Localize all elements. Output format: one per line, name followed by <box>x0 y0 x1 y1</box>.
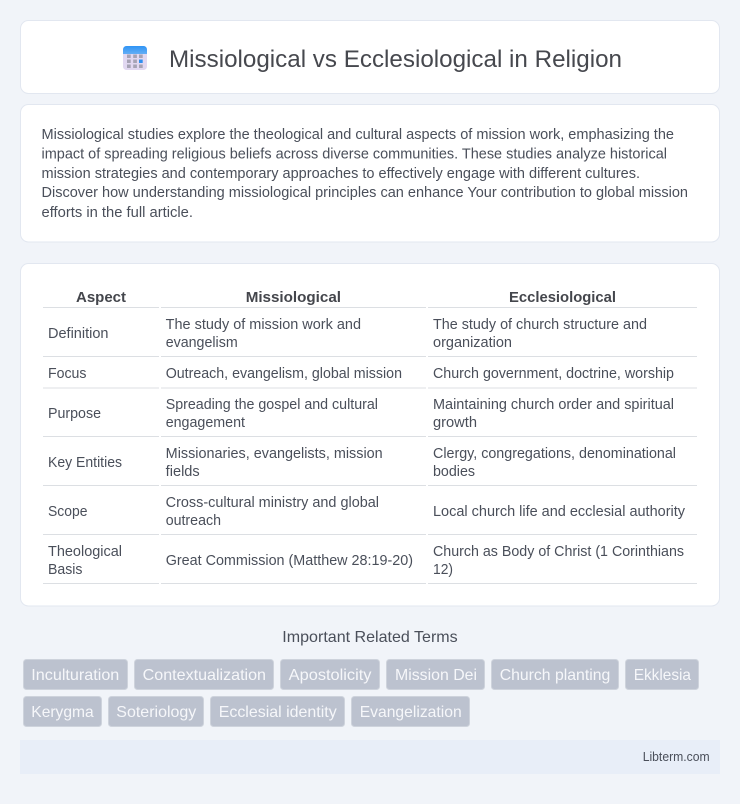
tag list <box>24 660 698 726</box>
tag: Soteriology: Soteriology <box>116 704 196 721</box>
table row: key entities: Key Entities <box>48 455 122 471</box>
tag: Ecclesial identity: Ecclesial identity <box>219 704 337 721</box>
tag: Church planting: Church planting <box>500 667 610 684</box>
panel: comparison table <box>20 264 720 606</box>
table row: theological basis: Church as Body of Christ (1 Corinthians <box>433 544 684 560</box>
tag: Inculturation: Inculturation <box>31 667 119 684</box>
table row: scope: outreach <box>166 513 221 529</box>
table row: purpose: Purpose <box>48 406 101 422</box>
text block: introduction paragraph <box>42 127 688 221</box>
table row: purpose: engagement <box>166 415 245 431</box>
table row: purpose: Spreading the gospel and cultural <box>166 397 378 413</box>
tag: Ekklesia: Ekklesia <box>634 667 691 684</box>
tag: Ecclesial identity <box>210 696 344 726</box>
panel: introduction <box>20 104 720 242</box>
table row: scope: Cross-cultural ministry and global <box>166 495 379 511</box>
table row: focus: Church government, doctrine, worship <box>433 366 674 382</box>
tag: Contextualization <box>134 660 274 690</box>
table row: purpose: growth <box>433 415 477 431</box>
table row: definition: evangelism <box>166 335 238 351</box>
table row: key entities: Clergy, congregations, denominational <box>433 446 676 462</box>
tag: Apostolicity <box>280 660 380 690</box>
table row: scope: Scope <box>48 504 88 520</box>
tag: Church planting <box>492 660 618 690</box>
table header row: Aspect <box>76 289 126 306</box>
title: Missiological vs Ecclesiological in Religion <box>169 46 622 73</box>
text block: introduction paragraph: impact of spreading religious beliefs across diverse communities. These studies analyze historical <box>42 146 667 162</box>
footer credit: Libterm.com <box>643 750 710 764</box>
table header row <box>76 289 616 306</box>
table row: purpose <box>48 397 674 431</box>
text block: introduction paragraph: Missiological studies explore the theological and cultural aspects of mission work, emphasizing the <box>42 127 674 143</box>
icon: calendar <box>123 46 147 70</box>
table header row: Ecclesiological <box>509 289 616 306</box>
table row: definition <box>48 317 647 351</box>
table row: focus: Focus <box>48 366 86 382</box>
table row: theological basis: Theological <box>48 544 122 560</box>
table row: scope: Local church life and ecclesial authority <box>433 504 686 520</box>
tag: Mission Dei <box>386 660 484 690</box>
tag: Mission Dei: Mission Dei <box>395 667 477 684</box>
table row: key entities: fields <box>166 464 200 480</box>
text block: introduction paragraph: efforts in the full article. <box>42 205 193 221</box>
table row: focus: Outreach, evangelism, global mission <box>166 366 402 382</box>
tag: Apostolicity: Apostolicity <box>289 667 372 684</box>
panel: title card <box>20 20 720 94</box>
tag: Kerygma <box>24 696 102 726</box>
table header row: Missiological <box>246 289 341 306</box>
table row: key entities <box>48 446 676 480</box>
tag: Evangelization: Evangelization <box>360 704 462 721</box>
table row: definition: organization <box>433 335 512 351</box>
tag: Contextualization: Contextualization <box>143 667 266 684</box>
tag: Ekklesia <box>626 660 698 690</box>
table row: definition: Definition <box>48 326 108 342</box>
table row: scope <box>48 495 686 529</box>
footer <box>20 740 720 774</box>
table row: focus <box>48 366 674 382</box>
heading: important related terms: Important Related Terms <box>282 629 458 646</box>
tag: Soteriology <box>108 696 204 726</box>
table row: theological basis: 12) <box>433 562 453 578</box>
text block: introduction paragraph: Discover how understanding missiological principles can enhance Your contribution to global mission <box>42 185 688 201</box>
table row: purpose: Maintaining church order and spiritual <box>433 397 674 413</box>
table row: definition: The study of mission work and <box>166 317 361 333</box>
table row: key entities: bodies <box>433 464 475 480</box>
text block: introduction paragraph: mission strategies and contemporary approaches to effectively engage with different cultures. <box>42 166 640 182</box>
table row: key entities: Missionaries, evangelists, mission <box>166 446 383 462</box>
table row: definition: The study of church structure and <box>433 317 647 333</box>
tag: Evangelization <box>352 696 470 726</box>
table row: theological basis: Great Commission (Matthew 28:19-20) <box>166 553 413 569</box>
tag: Kerygma: Kerygma <box>31 704 94 721</box>
table row: theological basis: Basis <box>48 562 82 578</box>
table row: theological basis <box>48 544 684 578</box>
tag: Inculturation <box>24 660 128 690</box>
